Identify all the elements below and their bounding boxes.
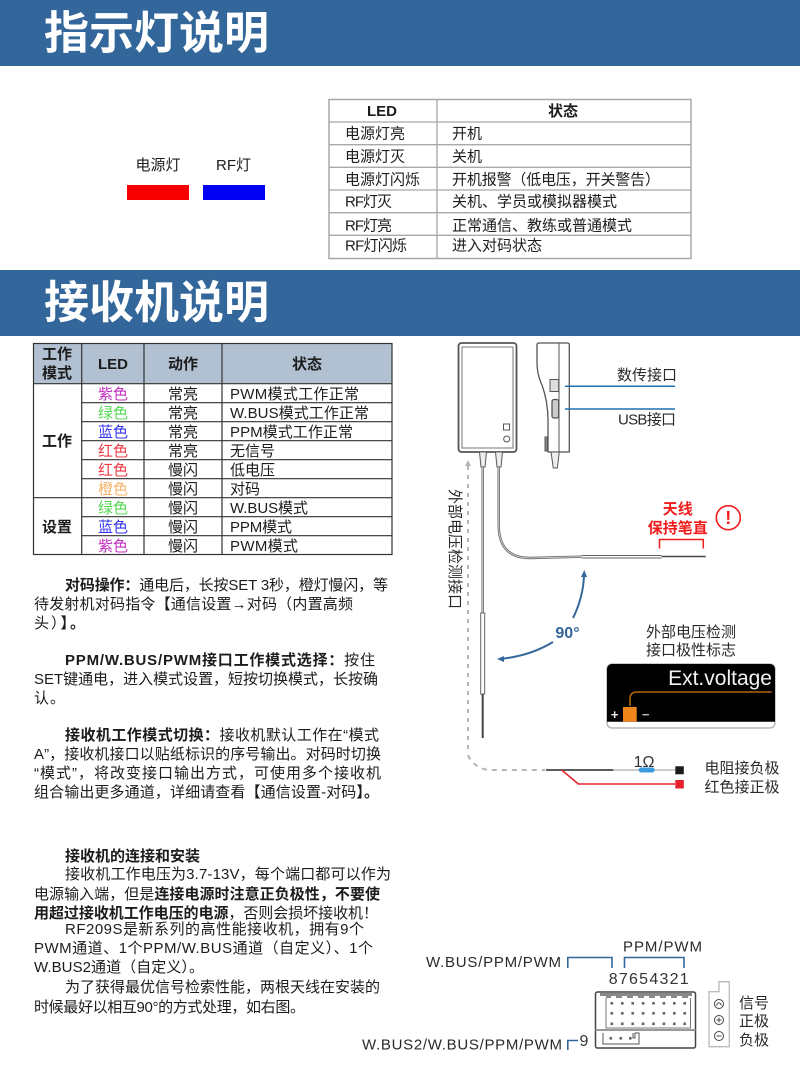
table: indicator light states xyxy=(329,100,691,258)
diagram: receiver connector pins xyxy=(596,992,696,1048)
table: receiver LED modes: 状态 xyxy=(292,355,322,373)
text block: connection and installation: 接收机工作电压为3.7-13V，每个端口都可以作为 xyxy=(65,866,391,883)
table: indicator light states: 进入对码状态 xyxy=(452,238,542,254)
heading: indicator lights: 指示灯说明 xyxy=(44,8,269,58)
table: indicator light states: 电源灯亮 xyxy=(345,126,405,142)
table: receiver LED modes: 工作 xyxy=(42,433,72,450)
callouts: data and USB ports xyxy=(565,367,677,428)
table: indicator light states: RF灯灭 xyxy=(345,194,392,210)
table: receiver LED modes: 慢闪 xyxy=(168,462,198,479)
table: receiver LED modes: LED xyxy=(98,356,128,373)
table: indicator light states: 开机 xyxy=(452,126,482,142)
diagram: voltage lead with resistor xyxy=(546,754,684,788)
text block: connection and installation: W.BUS2通道（自定义）。 xyxy=(34,959,204,976)
table: receiver LED modes: PPM模式工作正常 xyxy=(230,424,353,441)
text block: connection and installation: 时候最好以相互90°的方式处理，如右图。 xyxy=(34,999,305,1016)
table: receiver LED modes: 橙色 xyxy=(98,481,128,498)
table: receiver LED modes: 慢闪 xyxy=(168,500,198,517)
table: receiver LED modes xyxy=(34,344,392,555)
label: external voltage detection port: 外部电压检测接口 xyxy=(446,489,463,609)
table: receiver LED modes: 常亮 xyxy=(168,405,198,422)
callout: antenna keep straight: ! xyxy=(725,508,731,528)
callout: polarity marking: + xyxy=(611,707,619,722)
text block: connection and installation: 电源输入端，但是连接电源时注意正负极性，不要使 xyxy=(34,885,380,903)
channel labels and brackets: 87654321 xyxy=(609,971,689,988)
table: indicator light states: LED xyxy=(367,103,397,120)
diagram: voltage lead with resistor: 1Ω xyxy=(634,754,654,771)
table: receiver LED modes: W.BUS模式工作正常 xyxy=(230,405,369,422)
text block: pairing: 待发射机对码指令【通信设置→对码（内置高频 xyxy=(34,596,353,613)
table: receiver LED modes: 紫色 xyxy=(98,386,128,403)
table: receiver LED modes: 无信号 xyxy=(230,443,275,460)
text block: interface mode selection: 认。 xyxy=(34,690,65,707)
table: receiver LED modes: 慢闪 xyxy=(168,519,198,536)
indicator colour swatches: 电源灯 xyxy=(135,157,181,174)
channel labels and brackets: W.BUS2/W.BUS/PPM/PWM xyxy=(362,1036,562,1054)
labels: signal, positive, negative: 负极 xyxy=(739,1032,769,1049)
channel labels and brackets: W.BUS/PPM/PWM xyxy=(426,954,561,971)
heading: receiver: 接收机说明 xyxy=(44,277,269,328)
arrow: 90 degree arc: 90° xyxy=(555,625,580,642)
labels: signal, positive, negative xyxy=(739,995,769,1049)
table: receiver LED modes: PWM模式 xyxy=(230,538,298,555)
text block: pairing xyxy=(34,576,388,632)
callouts: data and USB ports: 数传接口 xyxy=(617,367,677,384)
table: indicator light states: 开机报警（低电压，开关警告） xyxy=(452,172,660,188)
table: receiver LED modes: 常亮 xyxy=(168,424,198,441)
text block: connection and installation: 为了获得最优信号检索性能，两根天线在安装的 xyxy=(65,979,380,996)
text block: receiver working mode: 组合输出更多通道，详细请查看【通信设置-对码】。 xyxy=(34,784,379,801)
text block: connection and installation: 用超过接收机工作电压的电源，否则会损坏接收机！ xyxy=(34,904,378,922)
channel labels and brackets: PPM/PWM xyxy=(623,938,702,956)
callout: antenna keep straight: 保持笔直 xyxy=(648,519,708,537)
text block: interface mode selection xyxy=(34,651,378,707)
table: receiver LED modes: 动作 xyxy=(168,356,198,373)
callout: polarity marking: Ext.voltage xyxy=(668,667,772,690)
table: receiver LED modes: 常亮 xyxy=(168,386,198,403)
table: receiver LED modes: W.BUS模式 xyxy=(230,500,308,517)
table: receiver LED modes: 蓝色 xyxy=(98,424,128,441)
diagram: receiver front view with antennas xyxy=(458,343,706,738)
text block: pairing: 对码操作：通电后，长按SET 3秒，橙灯慢闪，等 xyxy=(65,576,388,594)
text block: receiver working mode xyxy=(34,726,381,801)
diagram: pin polarity tag xyxy=(709,982,729,1047)
table: receiver LED modes: 红色 xyxy=(98,462,128,479)
heading: indicator lights xyxy=(0,0,800,66)
diagram: receiver side view xyxy=(537,343,569,468)
text block: receiver working mode: “模式”，将改变接口输出方式，可使用多个接收机 xyxy=(34,765,381,782)
table: receiver LED modes: 绿色 xyxy=(98,500,128,517)
table: indicator light states: 关机、学员或模拟器模式 xyxy=(452,194,617,210)
text block: connection and installation: 接收机的连接和安装 xyxy=(65,847,200,865)
arrow: 90 degree arc xyxy=(497,570,587,662)
labels: resistor and red wire polarity: 电阻接负极 xyxy=(704,760,780,777)
labels: signal, positive, negative: 正极 xyxy=(739,1013,769,1030)
text block: pairing: 头）】。 xyxy=(34,615,85,632)
table: receiver LED modes: 模式 xyxy=(42,364,72,382)
callout: polarity marking: 接口极性标志 xyxy=(646,642,736,659)
labels: signal, positive, negative: 信号 xyxy=(739,995,769,1012)
text block: receiver working mode: 接收机工作模式切换：接收机默认工作在“模式 xyxy=(65,726,379,744)
table: receiver LED modes: 低电压 xyxy=(230,462,275,479)
table: receiver LED modes: 红色 xyxy=(98,443,128,460)
callouts: data and USB ports: USB接口 xyxy=(618,412,676,428)
channel labels and brackets: 9 xyxy=(580,1033,588,1050)
text block: interface mode selection: PPM/W.BUS/PWM接口工作模式选择：按住 xyxy=(65,651,375,669)
table: indicator light states: RF灯闪烁 xyxy=(345,238,407,254)
table: indicator light states: 电源灯闪烁 xyxy=(345,172,420,188)
table: receiver LED modes: 蓝色 xyxy=(98,519,128,536)
table: receiver LED modes: 慢闪 xyxy=(168,538,198,555)
table: indicator light states: 关机 xyxy=(452,148,482,166)
callout: polarity marking: − xyxy=(642,707,650,722)
text block: connection and installation: PWM通道、1个PPM/W.BUS通道（自定义）、1个 xyxy=(34,940,373,957)
labels: resistor and red wire polarity: 红色接正极 xyxy=(704,779,780,796)
text block: receiver working mode: A”，接收机接口以贴纸标识的序号输出。对码时切换 xyxy=(34,746,381,763)
table: receiver LED modes: 常亮 xyxy=(168,443,198,460)
table: receiver LED modes: PWM模式工作正常 xyxy=(230,386,359,403)
callout: polarity marking xyxy=(607,624,775,728)
table: receiver LED modes: 对码 xyxy=(230,481,260,498)
text block: interface mode selection: SET键通电，进入模式设置，短按切换模式，长按确 xyxy=(34,671,378,688)
table: receiver LED modes: 工作 xyxy=(42,346,72,363)
callout: antenna keep straight xyxy=(648,500,740,548)
channel labels and brackets xyxy=(362,938,702,1054)
table: indicator light states: RF灯亮 xyxy=(345,218,392,234)
indicator colour swatches xyxy=(127,157,265,200)
table: receiver LED modes: 设置 xyxy=(42,519,72,536)
heading: receiver xyxy=(0,270,800,336)
table: indicator light states: 正常通信、教练或普通模式 xyxy=(452,218,632,234)
table: indicator light states: 电源灯灭 xyxy=(345,148,405,166)
table: receiver LED modes: 紫色 xyxy=(98,538,128,555)
callout: antenna keep straight: 天线 xyxy=(663,500,693,518)
text block: connection and installation: RF209S是新系列的高性能接收机，拥有9个 xyxy=(65,921,364,938)
callout: polarity marking: 外部电压检测 xyxy=(646,624,736,641)
arrow: external voltage dotted path xyxy=(465,460,545,770)
table: receiver LED modes: 慢闪 xyxy=(168,481,198,498)
table: receiver LED modes: PPM模式 xyxy=(230,519,292,536)
table: receiver LED modes: 绿色 xyxy=(98,405,128,422)
labels: resistor and red wire polarity xyxy=(704,760,780,796)
table: indicator light states: 状态 xyxy=(548,102,578,120)
indicator colour swatches: RF灯 xyxy=(216,157,251,174)
text block: connection and installation xyxy=(34,847,391,1016)
